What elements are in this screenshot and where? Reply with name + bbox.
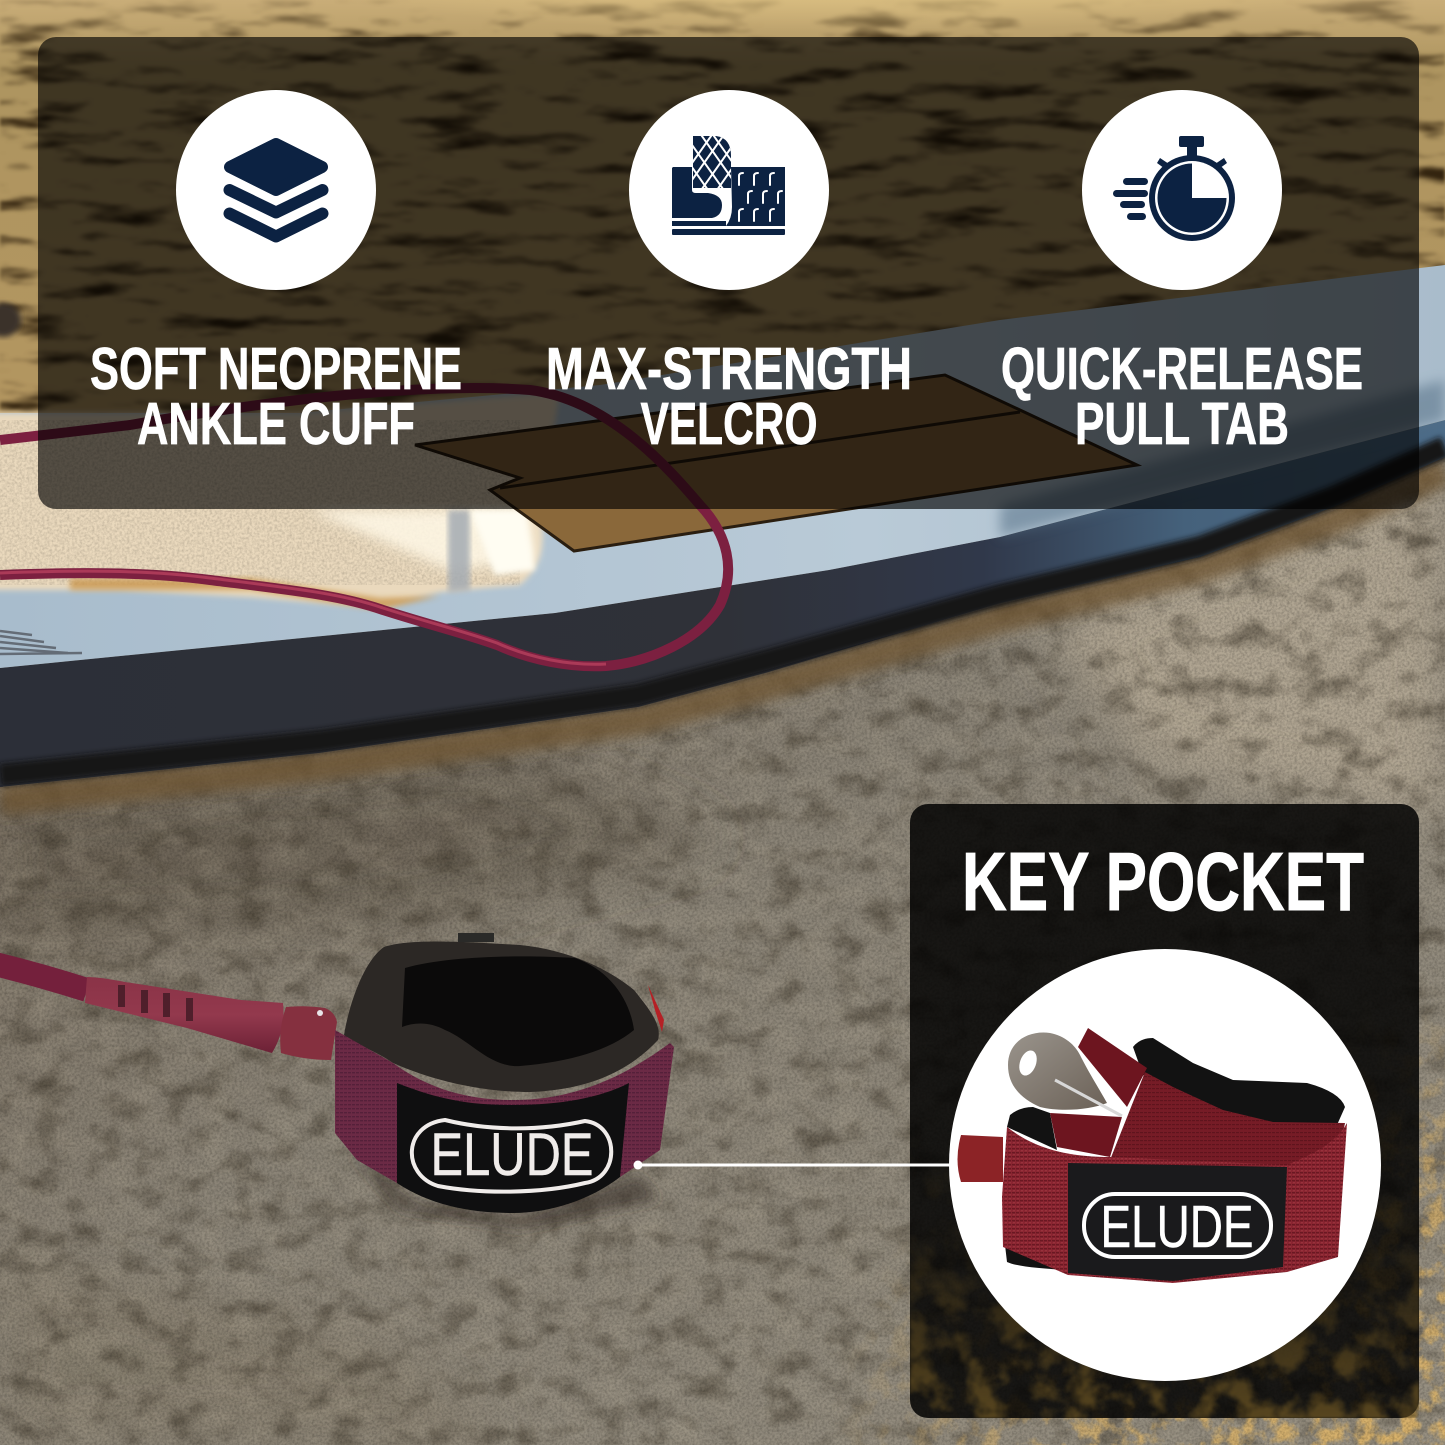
feature: soft neoprene ankle cuff: ANKLE CUFF	[137, 391, 415, 457]
lower sand	[0, 440, 1445, 1445]
neoprene liner	[344, 941, 659, 1092]
warm sand under the rail	[0, 470, 1445, 800]
icon: velcro strip	[672, 136, 785, 235]
feature: quick-release pull tab: PULL TAB	[1075, 391, 1289, 457]
icon: stopwatch	[1113, 136, 1235, 241]
feature: max-strength velcro	[546, 90, 912, 457]
cuff shadow	[345, 1150, 660, 1230]
leash cord on board	[0, 388, 728, 666]
panel: key pocket callout	[910, 804, 1419, 1418]
connector line to key pocket	[634, 1160, 950, 1170]
foam deck area	[0, 392, 560, 608]
black neoprene	[1133, 1038, 1345, 1130]
feature: soft neoprene ankle cuff: SOFT NEOPRENE	[90, 336, 462, 402]
vent lines	[0, 631, 82, 654]
circle with cuff photo	[949, 949, 1381, 1381]
rubber logo patch	[397, 1083, 629, 1213]
feature: soft neoprene ankle cuff	[90, 90, 462, 457]
key	[1008, 1033, 1122, 1116]
panel: top feature band	[38, 37, 1419, 509]
rubber logo patch	[1068, 1163, 1287, 1281]
icon: layers	[230, 144, 322, 236]
ELUDE logo: ELUDE	[1100, 1194, 1254, 1260]
velcro tabs	[1078, 1028, 1147, 1107]
surfboard deck	[0, 265, 1445, 668]
swivel cap	[280, 1006, 337, 1060]
red webbing strap	[1002, 1123, 1347, 1283]
swivel plug	[958, 1135, 1003, 1182]
feature: max-strength velcro: MAX-STRENGTH	[546, 336, 912, 402]
feature: max-strength velcro: VELCRO	[640, 391, 818, 457]
connector boot	[85, 977, 284, 1053]
feature: quick-release pull tab	[1001, 90, 1363, 457]
traction pad	[415, 375, 1137, 551]
surfboard rail	[0, 420, 1445, 787]
ankle cuff on sand with leash	[0, 933, 674, 1230]
ELUDE logo: ELUDE	[430, 1121, 594, 1188]
cord	[0, 964, 87, 990]
pocket flap	[1110, 1072, 1345, 1170]
upper sand	[0, 0, 1445, 560]
maroon strap	[335, 1030, 674, 1183]
